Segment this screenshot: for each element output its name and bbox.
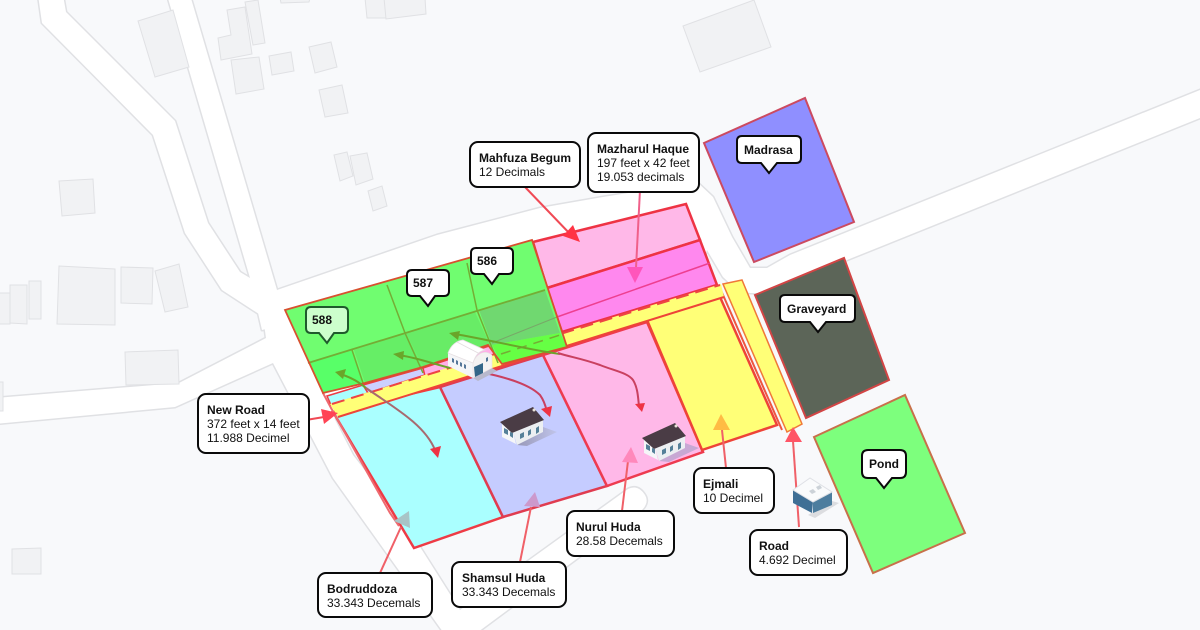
callout: Mazharul Haque: 197 feet x 42 feet	[597, 156, 690, 170]
callout: Madrasa	[737, 136, 801, 173]
arrow: Bodruddoza	[380, 511, 410, 573]
callout: Road: 4.692 Decimel	[759, 553, 836, 567]
callout: Shamsul Huda: Shamsul Huda	[462, 571, 546, 585]
parcel: Shamsul Huda	[440, 355, 607, 517]
parcel: Ejmali	[647, 297, 777, 450]
callout: 588: 588	[312, 313, 332, 327]
parcel: Nurul Huda	[543, 322, 703, 486]
parcel: Madrasa	[704, 98, 854, 262]
callout: Nurul Huda: 28.58 Decemals	[576, 534, 663, 548]
arrow: Road	[785, 427, 802, 527]
callout: Bodruddoza: Bodruddoza	[327, 582, 397, 596]
arrow: 586 to Nurul Huda	[449, 331, 645, 412]
arrow: 587 to Shamsul Huda	[393, 351, 552, 417]
callout: Ejmali: 10 Decimel	[703, 491, 763, 505]
callout: Ejmali	[694, 468, 774, 513]
parcel: Bodruddoza	[323, 387, 503, 548]
callout: Pond: Pond	[869, 457, 899, 471]
callout: Pond	[862, 450, 906, 488]
callout: Shamsul Huda: 33.343 Decemals	[462, 585, 555, 599]
callout: 587: 587	[413, 276, 433, 290]
arrow: Nurul Huda	[622, 447, 638, 511]
arrow: 588 to Bodruddoza	[335, 369, 441, 458]
arrow: Shamsul Huda	[520, 492, 540, 562]
arrow: Mazharul Haque	[627, 190, 643, 283]
callout: Graveyard	[780, 295, 855, 332]
icon: warehouse	[448, 340, 497, 381]
callout: New Road: 11.988 Decimel	[207, 431, 290, 445]
callout: New Road: New Road	[207, 403, 265, 417]
callout: Mazharul Haque	[588, 133, 699, 192]
callout: 586: 586	[477, 254, 497, 268]
parcel: Pond	[814, 395, 965, 573]
callout: Bodruddoza: 33.343 Decemals	[327, 596, 420, 610]
callout: 588	[306, 307, 348, 343]
callout: Mahfuza Begum: 12 Decimals	[479, 165, 545, 179]
icon: office building	[793, 478, 839, 518]
arrow: New Road	[300, 409, 338, 424]
arrow: Mahfuza Begum	[525, 187, 580, 242]
parcel: Graveyard	[755, 258, 889, 418]
callout: 587	[407, 270, 449, 306]
callout: Mazharul Haque: 19.053 decimals	[597, 170, 684, 184]
callout: Road: Road	[759, 539, 789, 553]
callout: Nurul Huda: Nurul Huda	[576, 520, 641, 534]
parcels: green plots 586 587 588	[285, 240, 567, 393]
callout: Road	[750, 530, 847, 575]
arrow: Ejmali	[713, 414, 730, 468]
callout: Ejmali: Ejmali	[703, 477, 738, 491]
icon: house in Shamsul Huda plot	[500, 407, 557, 446]
background buildings	[0, 0, 771, 574]
parcel: Mazharul Haque	[547, 240, 717, 332]
parcel: New Road	[330, 284, 724, 417]
small strips beside the new road	[327, 346, 497, 405]
callout: Nurul Huda	[567, 511, 674, 556]
callout: Mahfuza Begum	[470, 142, 580, 187]
icon: house in Nurul Huda plot	[642, 423, 699, 462]
callout: Graveyard: Graveyard	[787, 302, 846, 316]
parcel: Mahfuza Begum	[533, 204, 700, 288]
callout: New Road: 372 feet x 14 feet	[207, 417, 300, 431]
callout: Madrasa: Madrasa	[744, 143, 793, 157]
callout: 586	[471, 248, 513, 284]
callout: Mahfuza Begum: Mahfuza Begum	[479, 151, 571, 165]
callout: Bodruddoza	[318, 573, 432, 617]
callout: New Road	[198, 394, 309, 453]
callout: Mazharul Haque: Mazharul Haque	[597, 142, 689, 156]
parcel: Road strip	[720, 280, 802, 432]
callout: Shamsul Huda	[452, 562, 566, 607]
